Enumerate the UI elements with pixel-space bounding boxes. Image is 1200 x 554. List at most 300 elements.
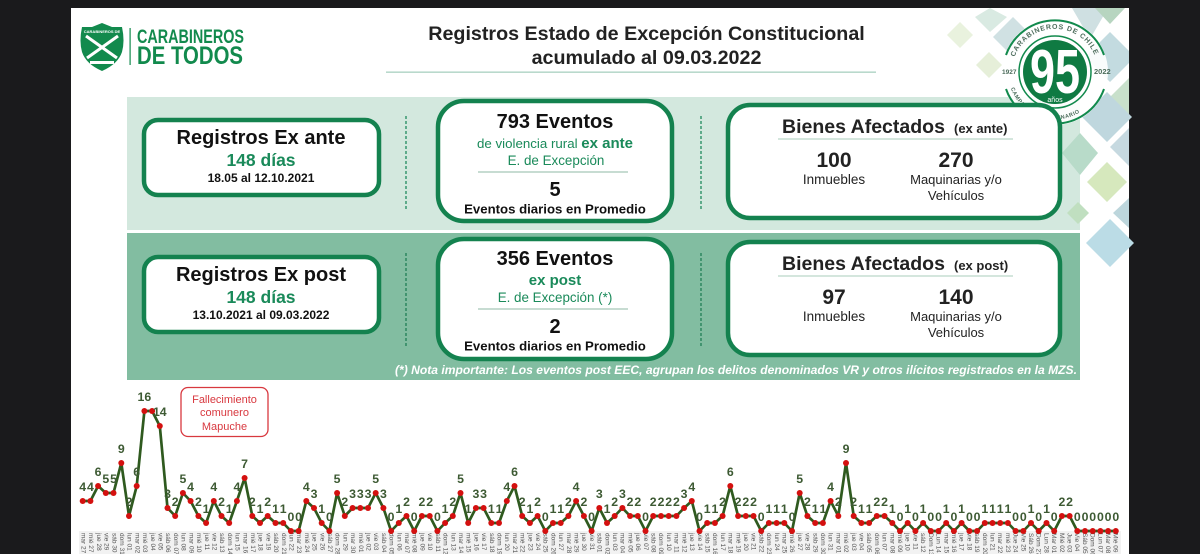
panel: 793 eventos: Eventos diarios en Promedio xyxy=(464,202,646,216)
icon: shield xyxy=(80,23,124,71)
date axis: jue 17 xyxy=(958,533,965,551)
data labels: 3 xyxy=(365,487,372,501)
data labels: 1 xyxy=(781,502,788,516)
data labels: 4 xyxy=(79,480,86,494)
date axis: mar 09 xyxy=(187,533,194,553)
panel: bienes afectados ex post: 140 xyxy=(938,286,974,309)
data labels: 1 xyxy=(773,502,780,516)
data labels: 1 xyxy=(272,502,279,516)
data labels: 2 xyxy=(1058,495,1065,509)
data labels: 0 xyxy=(974,510,981,524)
date axis: vie 10 xyxy=(426,533,433,550)
date axis: lun 27 xyxy=(557,533,564,551)
date axis: sáb 22 xyxy=(757,533,764,553)
date axis: mar 28 xyxy=(565,533,572,553)
date axis: vie 31 xyxy=(588,533,595,550)
date axis: Sáb 26 xyxy=(1027,533,1034,554)
chart line with markers xyxy=(83,411,1116,531)
date axis: lun 13 xyxy=(449,533,456,551)
logo: Carabineros de Todos xyxy=(80,23,244,71)
data labels: 1 xyxy=(280,502,287,516)
panel: ex post background xyxy=(127,233,1080,380)
date axis: mié 05 xyxy=(626,533,633,553)
data labels: 2 xyxy=(627,495,634,509)
data labels: 2 xyxy=(172,495,179,509)
data labels: 0 xyxy=(542,510,549,524)
date axis: vie 18 xyxy=(965,533,972,550)
date axis: jue 23 xyxy=(526,533,533,551)
data labels: 0 xyxy=(1074,510,1081,524)
data labels: 0 xyxy=(1051,510,1058,524)
panel: 356 eventos: 2 xyxy=(549,316,561,338)
data labels: 4 xyxy=(87,480,94,494)
panel: registros ex ante: 18.05 al 12.10.2021 xyxy=(208,171,315,185)
data labels: 0 xyxy=(326,510,333,524)
date axis: vie 14 xyxy=(696,533,703,550)
data labels: 2 xyxy=(611,495,618,509)
logo text line 2: DE TODOS xyxy=(137,42,243,70)
panel: bienes afectados ex post xyxy=(728,242,1060,355)
data labels: 2 xyxy=(735,495,742,509)
date axis: Sáb 05 xyxy=(1081,533,1088,554)
date axis: mar 27 xyxy=(80,533,86,553)
callout: Fallecimiento comunero Mapuche: comunero xyxy=(200,407,249,419)
date axis: vie 17 xyxy=(480,533,487,550)
panel: 793 eventos: 793 Eventos xyxy=(497,111,613,133)
data labels: 16 xyxy=(138,390,151,404)
data labels: 0 xyxy=(1020,510,1027,524)
date axis: mié 12 xyxy=(680,533,687,553)
data labels: 0 xyxy=(789,510,796,524)
data labels: 3 xyxy=(311,487,318,501)
data labels: 1 xyxy=(395,502,402,516)
data labels: 5 xyxy=(102,472,109,486)
panel: bienes afectados ex post: Inmuebles xyxy=(803,309,865,324)
data labels: 4 xyxy=(688,480,695,494)
data labels: 3 xyxy=(357,487,364,501)
date axis: sáb 13 xyxy=(218,533,225,553)
data labels: 2 xyxy=(418,495,425,509)
data labels: 2 xyxy=(835,495,842,509)
data labels: 2 xyxy=(249,495,256,509)
date axis: lun 31 xyxy=(827,533,834,551)
date axis: sáb 25 xyxy=(542,533,549,553)
panel: bienes afectados ex post: 97 xyxy=(822,286,846,309)
panel: 356 eventos xyxy=(438,239,672,359)
date axis: jue 16 xyxy=(472,533,479,551)
date axis: vie 29 xyxy=(103,533,110,550)
panel: bienes afectados ex ante: 270 xyxy=(938,149,974,172)
date axis: Jue 03 xyxy=(1066,533,1072,553)
data labels: 1 xyxy=(488,502,495,516)
date axis: mar 11 xyxy=(673,533,680,553)
date axis: jue 30 xyxy=(580,533,587,551)
data labels: 4 xyxy=(827,480,834,494)
date axis: sáb 18 xyxy=(488,533,495,553)
icon: 95 years badge: años xyxy=(1047,97,1063,104)
panel diamonds xyxy=(1062,133,1098,224)
data labels: 3 xyxy=(681,487,688,501)
panel: registros ex ante: Registros Ex ante xyxy=(177,127,345,149)
date axis: vie 07 xyxy=(642,533,649,550)
date axis: mié 08 xyxy=(411,533,418,553)
date axis: mar 23 xyxy=(295,533,302,553)
data labels: 0 xyxy=(1035,510,1042,524)
panel: bienes afectados ex post: Vehículos xyxy=(928,325,985,340)
date axis: mar 01 xyxy=(834,533,841,553)
data labels: 9 xyxy=(118,442,125,456)
icon: 95 years badge: CAMPAÑA * * CENTENARIO xyxy=(1011,88,1079,119)
panel: 356 eventos: Eventos diarios en Promedio xyxy=(464,338,646,354)
data labels: 1 xyxy=(765,502,772,516)
icon: 95 years badge xyxy=(1002,19,1111,124)
panel: registros ex post xyxy=(144,257,379,332)
date axis: mié 17 xyxy=(249,533,256,553)
data labels: 4 xyxy=(187,480,194,494)
date axis: sáb 30 xyxy=(110,533,117,553)
data labels: 14 xyxy=(153,405,167,419)
date axis: jue 03 xyxy=(850,533,857,551)
date axis: Lun 07 xyxy=(1096,533,1103,553)
data labels: 5 xyxy=(334,472,341,486)
data labels: 6 xyxy=(511,465,518,479)
background diamonds xyxy=(947,8,1134,267)
title: Registros Estado de Excepción Constitucional xyxy=(428,23,865,45)
panel: bienes afectados ex ante: (ex ante) xyxy=(954,121,1007,136)
date axis: jue 20 xyxy=(742,533,749,551)
data labels: 1 xyxy=(496,502,503,516)
date axis: mié 24 xyxy=(303,533,310,553)
panel: bienes afectados ex ante xyxy=(728,105,1060,218)
date axis: mar 02 xyxy=(133,533,140,553)
data labels: 0 xyxy=(411,510,418,524)
data labels: 1 xyxy=(526,502,533,516)
data labels: 6 xyxy=(95,465,102,479)
data labels: 3 xyxy=(164,487,171,501)
date axis: Mié 02 xyxy=(1058,533,1065,553)
data labels: 2 xyxy=(449,495,456,509)
date axis: jue 06 xyxy=(634,533,641,551)
data labels: 0 xyxy=(388,510,395,524)
data labels: 0 xyxy=(758,510,765,524)
data labels: 3 xyxy=(472,487,479,501)
data labels: 0 xyxy=(935,510,942,524)
divider: ex post xyxy=(406,253,701,348)
title xyxy=(386,23,876,73)
panel: bienes afectados ex post: (ex post) xyxy=(954,258,1008,273)
data labels: 0 xyxy=(287,510,294,524)
data labels: 1 xyxy=(989,502,996,516)
date axis: mié 26 xyxy=(788,533,795,553)
date axis: mié 16 xyxy=(950,533,957,553)
date axis: sáb 15 xyxy=(703,533,710,553)
data labels: 2 xyxy=(673,495,680,509)
data labels xyxy=(79,390,1119,524)
date axis: Jue 24 xyxy=(1012,533,1019,553)
date axis: mié 01 xyxy=(357,533,364,553)
data labels: 0 xyxy=(642,510,649,524)
data labels: 2 xyxy=(218,495,225,509)
data labels: 1 xyxy=(203,502,210,516)
date axis: mar 07 xyxy=(403,533,410,553)
data labels: 2 xyxy=(719,495,726,509)
date axis: jue 25 xyxy=(311,533,318,551)
data labels: 4 xyxy=(503,480,510,494)
date axis: mar 08 xyxy=(888,533,895,553)
date axis: lun 17 xyxy=(719,533,726,551)
date axis: Vie 25 xyxy=(1019,533,1026,551)
data labels: 1 xyxy=(958,502,965,516)
panel: 356 eventos: ex post xyxy=(529,272,581,289)
date axis: sáb 04 xyxy=(380,533,387,553)
callout: Fallecimiento comunero Mapuche xyxy=(181,388,268,436)
date axis: Lun 28 xyxy=(1042,533,1049,553)
data labels: 3 xyxy=(480,487,487,501)
data labels: 1 xyxy=(920,502,927,516)
data labels: 0 xyxy=(295,510,302,524)
data labels: 1 xyxy=(1004,502,1011,516)
data labels: 4 xyxy=(210,480,217,494)
panel: registros ex post: Registros Ex post xyxy=(176,264,346,286)
date axis: lun 06 xyxy=(395,533,402,551)
date axis: mar 30 xyxy=(349,533,356,553)
date axis: vie 03 xyxy=(372,533,379,550)
data labels: 2 xyxy=(881,495,888,509)
data labels: 4 xyxy=(303,480,310,494)
date axis: jue 11 xyxy=(203,533,210,550)
data labels: 1 xyxy=(557,502,564,516)
data labels: 5 xyxy=(110,472,117,486)
date axis: mar 04 xyxy=(619,533,626,553)
panel: bienes afectados ex ante: Vehículos xyxy=(928,188,985,203)
data labels: 1 xyxy=(819,502,826,516)
data labels: 0 xyxy=(1012,510,1019,524)
icon: 95 years badge: 1927 xyxy=(1002,69,1017,76)
data labels: 2 xyxy=(565,495,572,509)
date axis: vie 28 xyxy=(804,533,811,550)
panel: bienes afectados ex post: Bienes Afectados xyxy=(782,253,945,275)
data labels: 0 xyxy=(912,510,919,524)
data labels: 2 xyxy=(804,495,811,509)
date axis: mié 02 xyxy=(842,533,849,553)
date axis: Lun 14 xyxy=(935,533,942,553)
date axis: jue 18 xyxy=(257,533,264,551)
date axis: mié 03 xyxy=(141,533,148,553)
data labels: 1 xyxy=(442,502,449,516)
data labels: 0 xyxy=(950,510,957,524)
date axis: jue 09 xyxy=(418,533,425,551)
date axis: mar 18 xyxy=(727,533,734,553)
data labels: 4 xyxy=(233,480,240,494)
data labels: 2 xyxy=(341,495,348,509)
data labels: 1 xyxy=(604,502,611,516)
date axis: lun 10 xyxy=(665,533,672,551)
date axis: vie 05 xyxy=(157,533,164,550)
date axis: lun 22 xyxy=(287,533,294,551)
date axis: lun 15 xyxy=(234,533,241,551)
date axis: vie 26 xyxy=(318,533,325,550)
date axis: Mar 08 xyxy=(1104,533,1111,553)
date axis: jue 10 xyxy=(904,533,911,551)
date axis: lun 20 xyxy=(503,533,510,551)
data labels: 2 xyxy=(534,495,541,509)
panel: 793 eventos: 5 xyxy=(549,179,561,201)
data labels: 3 xyxy=(596,487,603,501)
panel: bienes afectados ex ante: Maquinarias y/o xyxy=(910,172,1002,187)
panel: registros ex post: 13.10.2021 al 09.03.2022 xyxy=(193,308,330,322)
date axis: mar 25 xyxy=(780,533,787,553)
data labels: 1 xyxy=(711,502,718,516)
date axis: Mié 09 xyxy=(1112,533,1119,553)
data labels: 1 xyxy=(465,502,472,516)
date axis: mié 23 xyxy=(1004,533,1011,553)
data labels: 4 xyxy=(573,480,580,494)
data labels: 2 xyxy=(650,495,657,509)
panel: ex ante background xyxy=(127,97,1080,230)
data labels: 2 xyxy=(264,495,271,509)
panel: registros ex ante: 148 días xyxy=(226,150,296,170)
panel: bienes afectados ex post: Maquinarias y/o xyxy=(910,309,1002,324)
data labels: 5 xyxy=(179,472,186,486)
data labels: 0 xyxy=(1089,510,1096,524)
icon: shield: CARABINEROS DE xyxy=(84,29,121,34)
date axis: sáb 12 xyxy=(919,533,926,553)
date axis: mié 10 xyxy=(195,533,202,553)
data labels: 3 xyxy=(619,487,626,501)
data labels: 1 xyxy=(904,502,911,516)
icon: 95 years badge: 95 xyxy=(1030,38,1080,107)
data labels: 1 xyxy=(858,502,865,516)
panel: registros ex post: 148 días xyxy=(226,287,296,307)
date axis: mar 16 xyxy=(241,533,248,553)
date axis: lun 08 xyxy=(180,533,187,551)
date axis: vie 21 xyxy=(750,533,757,550)
date axis: mar 22 xyxy=(996,533,1003,553)
note: (*) Nota importante: Los eventos post EEC, agrupan los delitos denominados VR y otros ilícitos registrados en la MZS. xyxy=(395,363,1077,377)
panel: bienes afectados ex ante: 100 xyxy=(816,149,852,172)
date axis: sáb 19 xyxy=(973,533,980,553)
data labels: 3 xyxy=(380,487,387,501)
data labels: 2 xyxy=(580,495,587,509)
title: acumulado al 09.03.2022 xyxy=(532,47,761,69)
data labels: 9 xyxy=(843,442,850,456)
date axis: jue 27 xyxy=(796,533,803,551)
date axis: mié 09 xyxy=(896,533,903,553)
data labels: 6 xyxy=(133,465,140,479)
data labels: 1 xyxy=(1043,502,1050,516)
date axis: Mar 01 xyxy=(1050,533,1057,553)
date axis: lun 29 xyxy=(341,533,348,551)
panel: 356 eventos: 356 Eventos xyxy=(497,248,613,270)
date axis: vie 12 xyxy=(210,533,217,550)
data labels: 0 xyxy=(1082,510,1089,524)
data labels: 1 xyxy=(226,502,233,516)
data labels: 2 xyxy=(750,495,757,509)
date axis: sáb 20 xyxy=(272,533,279,553)
date axis: mar 15 xyxy=(942,533,949,553)
panel: bienes afectados ex ante: Inmuebles xyxy=(803,172,865,187)
data labels: 1 xyxy=(550,502,557,516)
icon: 95 years badge: CARABINEROS DE CHILE xyxy=(1010,24,1099,56)
data labels: 2 xyxy=(634,495,641,509)
date axis: sáb 01 xyxy=(596,533,603,553)
data labels: 2 xyxy=(403,495,410,509)
divider: ex ante xyxy=(406,116,701,211)
panel: bienes afectados ex ante: Bienes Afectados xyxy=(782,116,945,138)
data labels: 7 xyxy=(241,457,248,471)
date axis: mié 19 xyxy=(734,533,741,553)
date axis: mié 22 xyxy=(519,533,526,553)
panel: 793 eventos: E. de Excepción xyxy=(508,153,604,168)
date axis: vie 24 xyxy=(534,533,541,550)
callout: Fallecimiento comunero Mapuche: Fallecimiento xyxy=(192,394,257,406)
data labels: 0 xyxy=(696,510,703,524)
date axis xyxy=(79,531,1121,554)
date axis: jue 13 xyxy=(688,533,695,551)
data labels: 0 xyxy=(588,510,595,524)
date axis: Vie 04 xyxy=(1073,533,1080,551)
data labels: 0 xyxy=(1097,510,1104,524)
date axis: mar 14 xyxy=(457,533,464,553)
data labels: 1 xyxy=(889,502,896,516)
panel: 356 eventos: E. de Excepción (*) xyxy=(498,290,612,305)
data labels: 5 xyxy=(796,472,803,486)
data labels: 1 xyxy=(257,502,264,516)
data labels: 2 xyxy=(426,495,433,509)
data labels: 3 xyxy=(349,487,356,501)
date axis: vie 11 xyxy=(911,533,918,550)
data labels: 2 xyxy=(195,495,202,509)
data labels: 1 xyxy=(812,502,819,516)
data labels: 1 xyxy=(997,502,1004,516)
icon: 95 years badge: 2022 xyxy=(1094,67,1111,76)
date axis: jue 28 xyxy=(95,533,102,551)
data labels: 2 xyxy=(519,495,526,509)
data labels: 0 xyxy=(1105,510,1112,524)
data labels: 0 xyxy=(966,510,973,524)
callout: Fallecimiento comunero Mapuche: Mapuche xyxy=(202,421,247,433)
date axis: lun 24 xyxy=(773,533,780,551)
data labels: 1 xyxy=(866,502,873,516)
data labels: 6 xyxy=(727,465,734,479)
data labels: 2 xyxy=(665,495,672,509)
date axis: lun 21 xyxy=(988,533,995,551)
date axis: mar 21 xyxy=(511,533,518,553)
data labels: 2 xyxy=(658,495,665,509)
data labels: 1 xyxy=(981,502,988,516)
date axis: sáb 27 xyxy=(326,533,333,553)
date axis: jue 02 xyxy=(365,533,372,551)
data labels: 1 xyxy=(704,502,711,516)
date axis: mié 15 xyxy=(465,533,472,553)
date axis: lun 03 xyxy=(611,533,618,551)
data labels: 2 xyxy=(742,495,749,509)
date axis: mié 27 xyxy=(87,533,94,553)
data labels: 0 xyxy=(1112,510,1119,524)
data labels: 1 xyxy=(318,502,325,516)
data labels: 2 xyxy=(850,495,857,509)
data labels: 5 xyxy=(372,472,379,486)
date axis: sáb 11 xyxy=(434,533,441,552)
panel: 793 eventos xyxy=(438,101,672,221)
data labels: 2 xyxy=(1066,495,1073,509)
date axis: sáb 05 xyxy=(865,533,872,553)
panel: 793 eventos: de violencia rural ex ante xyxy=(477,135,633,152)
date axis: vie 19 xyxy=(264,533,271,550)
data labels: 1 xyxy=(943,502,950,516)
data labels: 1 xyxy=(1028,502,1035,516)
date axis: lun 01 xyxy=(126,533,133,551)
